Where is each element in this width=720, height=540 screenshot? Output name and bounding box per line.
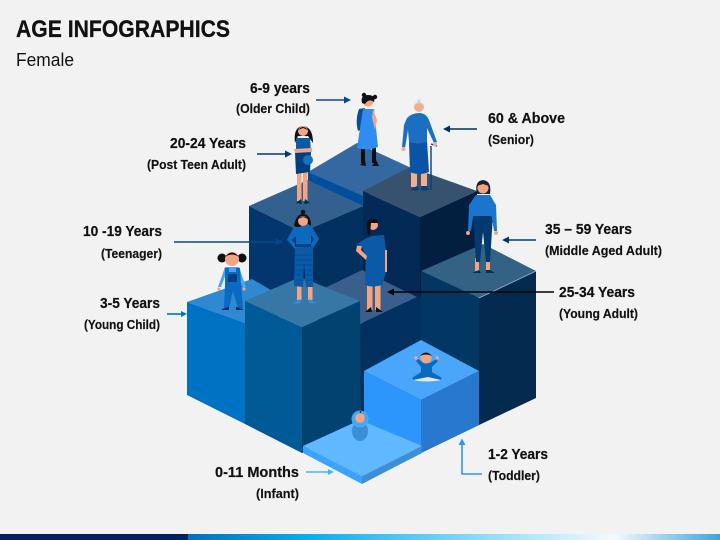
stepped isometric blocks	[187, 143, 536, 484]
label: 0-11 months: 0-11 Months	[215, 465, 299, 481]
label: 35-59 years	[545, 222, 662, 258]
block: 0-11 months	[303, 420, 422, 484]
label: 60 and above: 60 & Above	[488, 111, 565, 127]
figure: young adult	[356, 219, 387, 312]
block: 25-34 years	[300, 270, 421, 424]
figure: teenager	[287, 210, 319, 304]
figure: infant	[352, 410, 368, 441]
label: 25-34 years	[559, 285, 638, 321]
arrow: 6-9 years	[316, 96, 351, 104]
title: AGE INFOGRAPHICS	[16, 16, 230, 43]
label: 60 and above: (Senior)	[488, 133, 534, 147]
label: 10-19 years	[83, 224, 162, 261]
label: 25-34 years: (Young Adult)	[559, 307, 638, 321]
label: 0-11 months: (Infant)	[256, 487, 299, 501]
arrow: 3-5 years	[167, 311, 187, 317]
label: 3-5 years: 3-5 Years	[100, 296, 160, 312]
label: 6-9 years: 6-9 years	[250, 81, 310, 97]
subtitle: Female	[16, 49, 74, 70]
arrow: 25-34 years	[387, 288, 554, 296]
label: 3-5 years: (Young Child)	[84, 318, 160, 332]
block: 1-2 years	[364, 340, 479, 453]
label: 20-24 years	[147, 136, 246, 172]
arrow: 10-19 years	[174, 238, 283, 246]
figure: post teen adult	[294, 126, 313, 204]
label: 6-9 years	[236, 81, 310, 116]
label: 25-34 years: 25-34 Years	[559, 285, 635, 301]
label: 1-2 years: 1-2 Years	[488, 447, 548, 463]
block: 6-9 years	[308, 143, 420, 206]
label: 0-11 months	[215, 465, 299, 501]
label: 35-59 years: 35 – 59 Years	[545, 222, 632, 238]
figure: senior	[402, 99, 437, 190]
arrow: 35-59 years	[502, 236, 536, 244]
label: 10-19 years: 10 -19 Years	[83, 224, 162, 240]
arrow: 0-11 months	[306, 469, 334, 475]
block: 20-24 years	[249, 180, 363, 320]
label: 3-5 years	[84, 296, 160, 332]
block: 35-59 years	[421, 244, 536, 453]
label: 35-59 years: (Middle Aged Adult)	[545, 244, 662, 258]
block: 3-5 years	[187, 279, 305, 424]
figure: young child	[217, 252, 246, 310]
arrow: 20-24 years	[257, 150, 292, 158]
block: 60 and above	[363, 167, 477, 340]
arrow: 1-2 years	[458, 438, 482, 474]
label: 60 and above	[488, 111, 565, 147]
label: 1-2 years: (Toddler)	[488, 469, 540, 483]
block: 10-19 years	[245, 277, 361, 453]
figure: middle aged adult	[466, 180, 498, 273]
label: 10-19 years: (Teenager)	[101, 247, 162, 261]
figure: toddler	[412, 352, 442, 382]
arrow: 60 and above	[443, 126, 477, 132]
figure: older child	[357, 93, 379, 166]
label: 1-2 years	[488, 447, 548, 483]
footer bar	[0, 534, 720, 540]
label: 6-9 years: (Older Child)	[236, 102, 310, 116]
label: 20-24 years: (Post Teen Adult)	[147, 158, 246, 172]
label: 20-24 years: 20-24 Years	[170, 136, 246, 152]
